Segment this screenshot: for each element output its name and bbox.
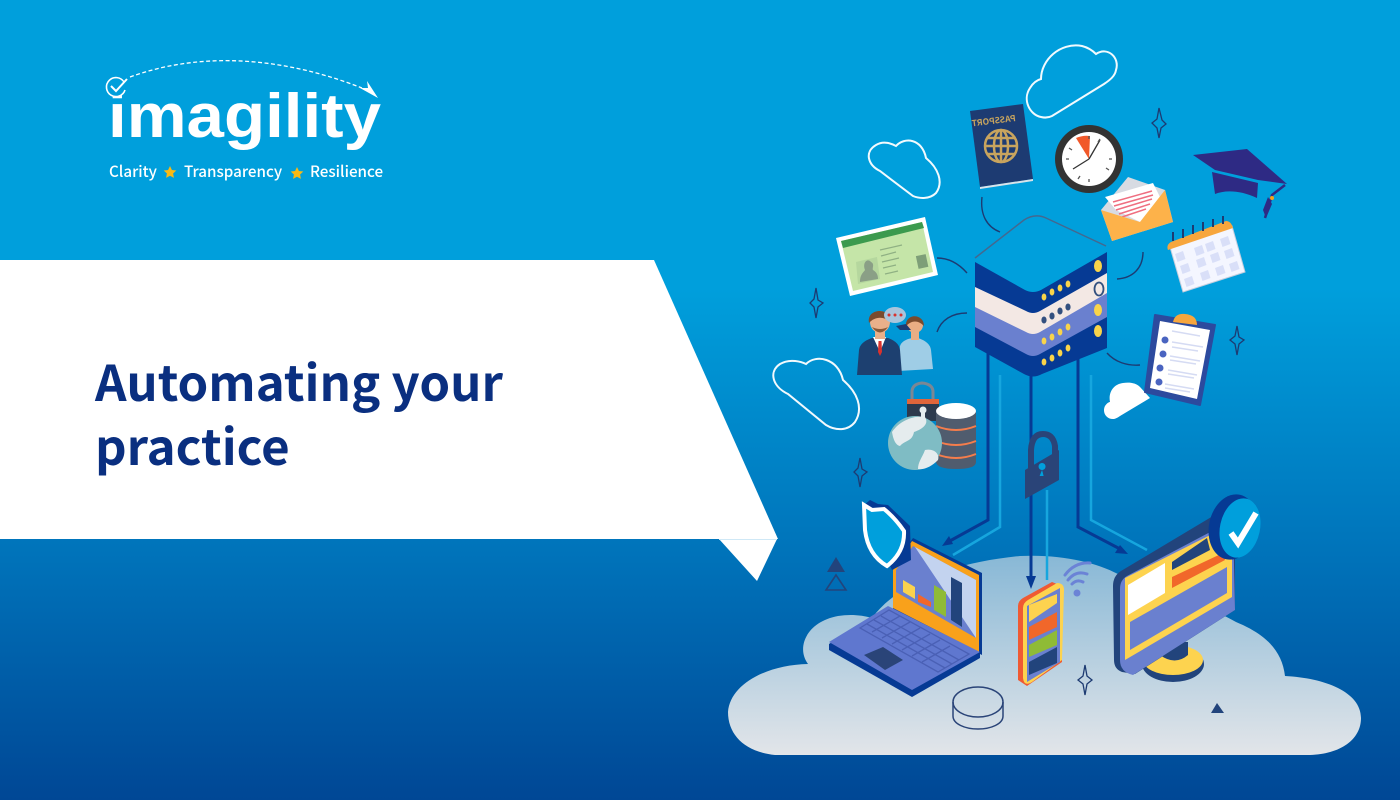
tagline: Clarity [109,160,158,182]
logo paper plane [360,81,378,98]
server band 2 [975,268,1107,334]
clock [1055,125,1123,193]
ID fingerprint [916,254,928,269]
logo [106,61,383,182]
padlock [907,383,939,421]
server top outline [975,216,1106,258]
central padlock [1025,434,1059,499]
passport globe [985,130,1017,162]
navy arrows [942,350,1128,589]
envelope [1101,177,1173,241]
passport [970,104,1033,189]
monitor screen [1125,524,1232,660]
graduation cap [1193,149,1287,218]
people in conversation [857,307,933,375]
outline cloud left [773,359,859,429]
laptop base [829,607,980,697]
clock red wedge [1076,136,1090,159]
light blue connector lines [953,375,1147,580]
laptop keyboard [860,610,969,672]
clipboard clip [1173,314,1197,325]
server lights [1042,260,1102,366]
server stack [975,216,1107,376]
shield [863,500,911,570]
ID card [836,217,938,296]
laptop trackpad [864,647,903,670]
laptop screen [893,538,982,655]
clipboard checklist [1156,336,1168,386]
big cloud platform [728,556,1361,755]
solid white cloud [1104,383,1150,419]
tagline: Transparency [184,160,283,182]
logo check circle [106,77,127,97]
server band 3 [975,290,1107,356]
outline clouds [773,45,1117,429]
server band 4 [975,312,1107,376]
title banner [0,260,778,581]
title [94,345,504,480]
passport label: PASSPORT [970,112,1016,129]
phone colour blocks [1029,594,1057,622]
laptop chart bars [903,580,915,599]
logo wordmark: imagility [108,82,382,151]
tagline: Resilience [310,160,383,182]
speech bubbles [896,324,911,330]
laptop [829,538,982,697]
title: Automating your [94,345,504,416]
clock hands [1073,140,1100,169]
tagline stars [164,166,303,179]
globe [888,406,942,470]
smartphone [1018,582,1064,686]
tagline [109,160,383,182]
wifi symbol [1065,563,1090,596]
outline cloud top right [1027,45,1117,118]
logo dashed arc [130,61,362,88]
check badge [1203,490,1266,564]
connector curves [937,197,1143,365]
person right [898,316,933,371]
clipboard [1145,314,1215,405]
outline cloud middle [869,141,940,198]
padlock, database and globe cluster [888,383,976,470]
title: practice [95,409,290,480]
outline cylinder [953,687,1003,729]
server band 1 [975,252,1107,313]
ID photo [856,257,880,284]
triangles [826,557,1224,713]
monitor stand [1142,646,1204,682]
sparkles [810,108,1244,695]
database [936,403,976,469]
monitor body [1113,516,1235,674]
person left [857,311,902,375]
desktop monitor [1113,490,1266,682]
calendar [1167,216,1245,292]
